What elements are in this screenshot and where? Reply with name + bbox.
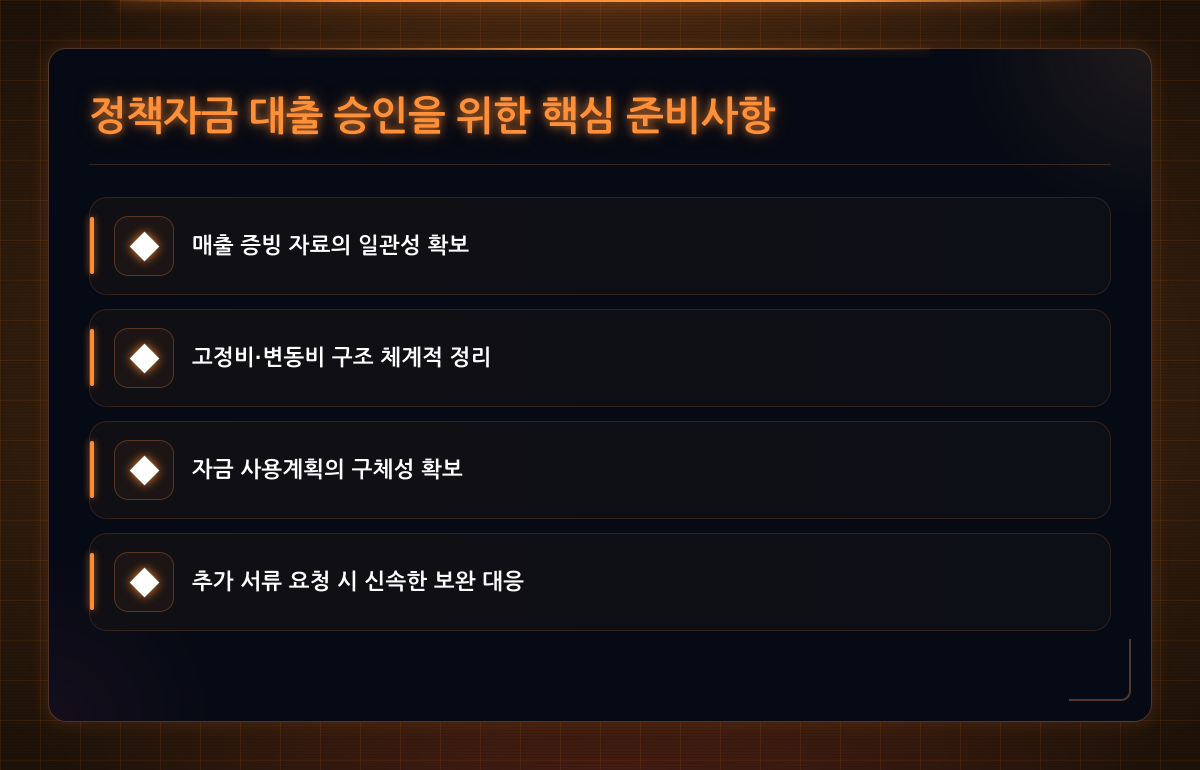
- icon: diamond 3: [114, 440, 174, 500]
- accent bar 2: [90, 329, 94, 386]
- title: 정책자금 대출 승인을 위한 핵심 준비사항: [89, 95, 775, 139]
- icon: diamond 1: [114, 216, 174, 276]
- accent bar 3: [90, 441, 94, 498]
- accent bar 4: [90, 553, 94, 610]
- corner bracket: [1069, 639, 1131, 701]
- list item 2: [89, 309, 1111, 407]
- top glow bar: [120, 0, 1080, 2]
- item text 4: 추가 서류 요청 시 신속한 보완 대응: [192, 569, 524, 594]
- icon: diamond 2: [114, 328, 174, 388]
- icon: diamond 4: [114, 552, 174, 612]
- item text 2: 고정비·변동비 구조 체계적 정리: [192, 345, 492, 370]
- item text 1: 매출 증빙 자료의 일관성 확보: [192, 233, 469, 258]
- accent bar 1: [90, 217, 94, 274]
- list item 1: [89, 197, 1111, 295]
- item text 3: 자금 사용계획의 구체성 확보: [192, 457, 463, 482]
- card top accent line: [270, 48, 930, 50]
- list item 4: [89, 533, 1111, 631]
- list item 3: [89, 421, 1111, 519]
